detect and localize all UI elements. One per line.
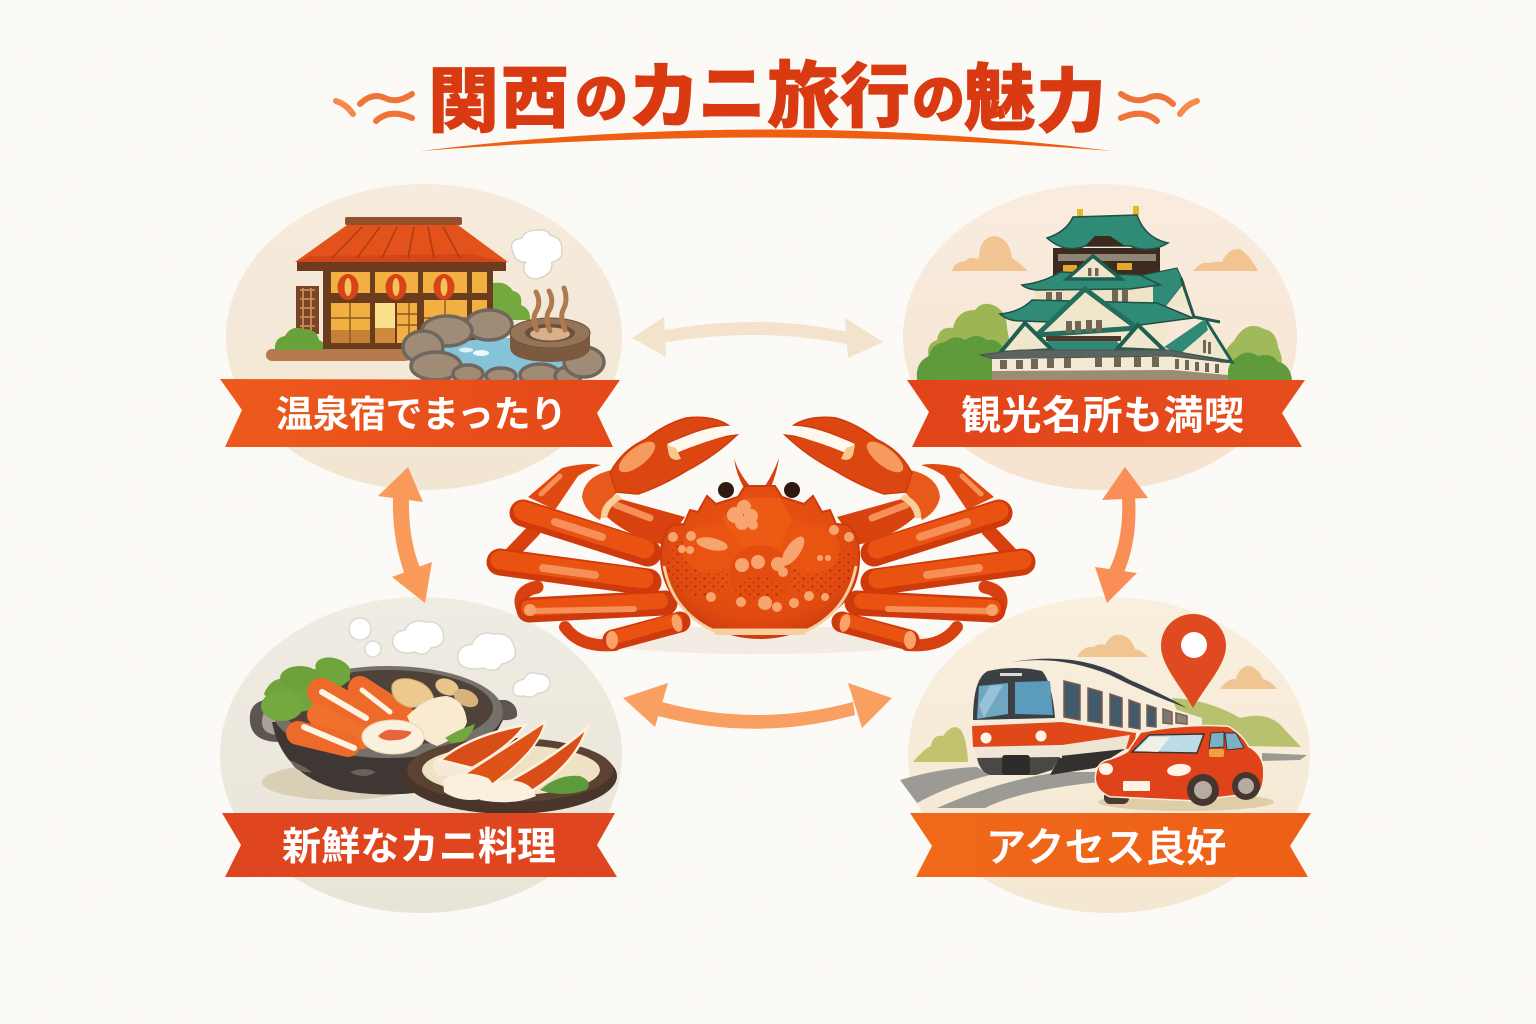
- illustration: train: [972, 659, 1202, 775]
- title ornament: right waves: [1121, 94, 1197, 121]
- crab antennae: [734, 458, 779, 488]
- crab illustration: [500, 417, 1022, 654]
- title: [428, 37, 1106, 147]
- crab shell: [661, 486, 859, 638]
- illustration: clouds: [1077, 635, 1277, 689]
- panel: crab cuisine: [220, 597, 622, 913]
- panel background circle: [908, 597, 1310, 913]
- illustration: plate of crab legs: [403, 722, 617, 814]
- ribbon: crab cuisine: [222, 813, 617, 877]
- ribbon: access: [910, 813, 1311, 877]
- illustration: hills: [913, 698, 1301, 762]
- ribbon label: crab cuisine: 新鮮なカニ料理: [282, 826, 556, 869]
- crab left legs and claw: [500, 417, 737, 649]
- panel: access: [900, 597, 1311, 913]
- illustration: steam clouds: [349, 618, 550, 697]
- arrow: right (castle to access): [1095, 467, 1148, 603]
- ribbon label: sightseeing: 観光名所も満喫: [961, 394, 1244, 438]
- panel: castle: [903, 184, 1305, 490]
- title ornament: left waves: [336, 94, 412, 121]
- arrow: top (onsen to castle): [632, 317, 883, 358]
- crab eyes: [718, 482, 800, 498]
- title: 旅: [767, 37, 839, 142]
- title: の: [575, 57, 628, 133]
- title: の: [912, 58, 965, 134]
- crab right legs and claw (mirrored): [785, 417, 1022, 649]
- panel background circle: [226, 184, 622, 490]
- ribbon label: access: アクセス良好: [986, 826, 1226, 870]
- title: 西: [501, 43, 569, 142]
- title underline swoosh: [420, 130, 1112, 151]
- ribbon: sightseeing: [907, 380, 1305, 447]
- illustration: stone tub with steam: [510, 288, 590, 362]
- crab shadow: [590, 626, 930, 654]
- illustration: steam cloud: [512, 231, 561, 278]
- panel: onsen inn: [220, 184, 622, 490]
- illustration: clouds: [952, 236, 1258, 271]
- illustration: Osaka castle: [980, 206, 1233, 380]
- ribbon label: onsen: 温泉宿でまったり: [276, 394, 567, 435]
- illustration: rock hot spring pool: [403, 310, 604, 386]
- title: 行: [840, 41, 910, 142]
- illustration: ryokan building: [266, 217, 530, 361]
- ribbon: onsen: [220, 379, 620, 447]
- arrow: bottom (cuisine to access): [623, 683, 892, 729]
- title: 関: [428, 45, 499, 147]
- title: 魅: [964, 40, 1036, 145]
- illustration: road: [900, 753, 1307, 808]
- illustration: hot pot with crab: [250, 654, 517, 800]
- title: ニ: [698, 39, 766, 138]
- title: カ: [628, 38, 700, 143]
- panel background circle: [903, 184, 1297, 490]
- title: 力: [1036, 46, 1106, 147]
- arrow: left (onsen to cuisine): [378, 467, 432, 603]
- panel background circle: [220, 597, 622, 913]
- illustration: car: [1096, 726, 1274, 811]
- icon: location pin: [1161, 614, 1226, 708]
- illustration: trees: [917, 304, 1292, 380]
